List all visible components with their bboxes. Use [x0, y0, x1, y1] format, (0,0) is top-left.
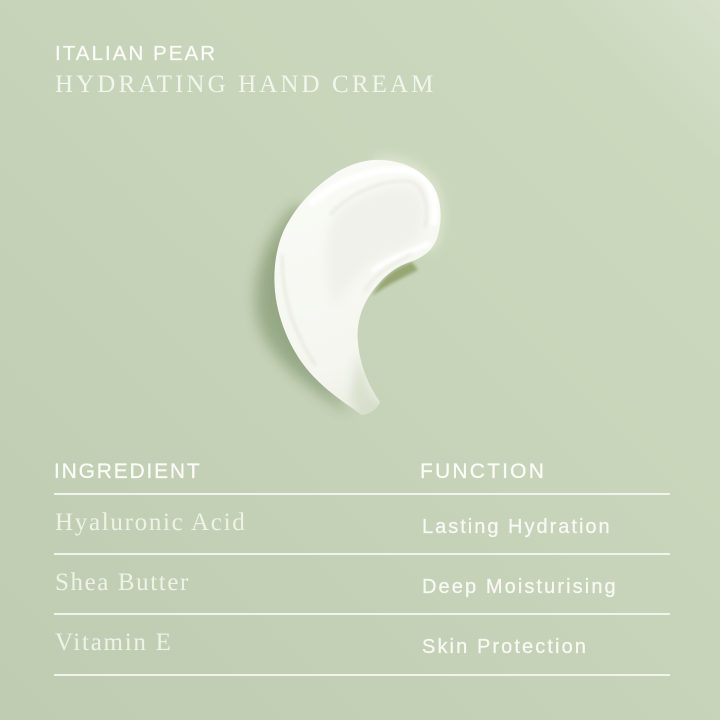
row 2 function: Deep Moisturising: [422, 576, 618, 598]
cream body: [274, 160, 441, 415]
row 3 ingredient: Vitamin E: [55, 629, 173, 656]
column header: function: FUNCTION: [420, 460, 546, 483]
illustration: cream swirl: [248, 154, 444, 415]
row 1 ingredient: Hyaluronic Acid: [55, 509, 246, 536]
row 3 function: Skin Protection: [422, 636, 588, 658]
cream shadow: [255, 157, 442, 414]
table: ingredients and functions: [54, 460, 670, 676]
column header: ingredient: INGREDIENT: [54, 460, 202, 483]
row 2 ingredient: Shea Butter: [55, 569, 190, 596]
row 1 function: Lasting Hydration: [422, 516, 612, 538]
heading: product type: HYDRATING HAND CREAM: [55, 71, 436, 98]
heading: product name: ITALIAN PEAR: [55, 42, 217, 65]
